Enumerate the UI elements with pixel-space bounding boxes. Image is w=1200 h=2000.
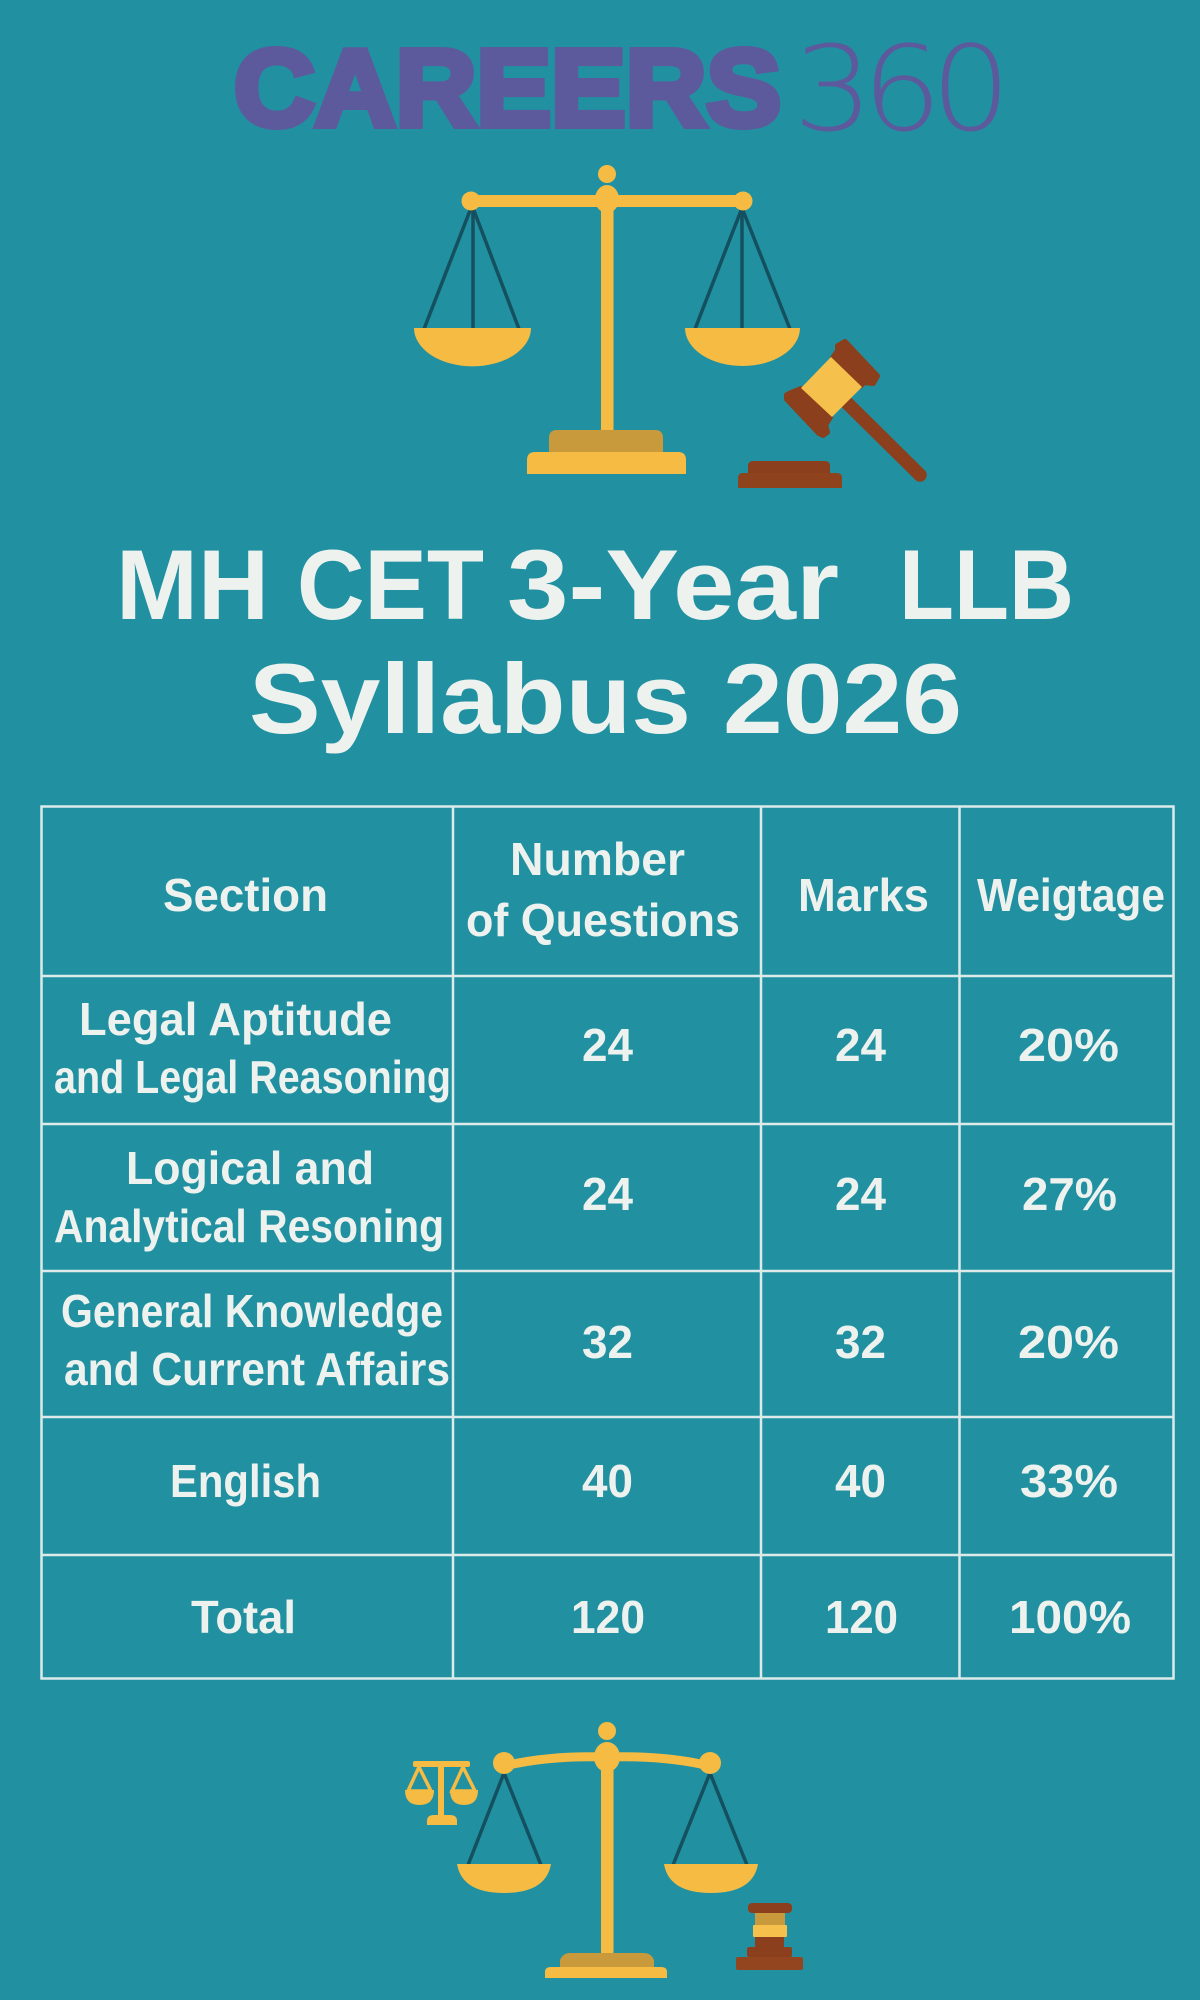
row: Logical and Analytical Reasoning: [54, 1142, 1117, 1252]
logo: Careers360: CAREERS: [234, 28, 781, 150]
title: MH: [116, 529, 269, 640]
row: Logical and Analytical Reasoning: 27%: [1022, 1168, 1117, 1220]
row: English: 33%: [1020, 1455, 1118, 1507]
row: Legal Aptitude: 24: [582, 1019, 633, 1071]
row: English: [170, 1455, 1118, 1507]
logo: Careers360: [234, 21, 1000, 158]
row: Total: 120: [825, 1591, 898, 1643]
row: General Knowledge: General Knowledge: [61, 1285, 443, 1337]
row: Legal Aptitude: 24: [835, 1019, 886, 1071]
row: English: English: [170, 1455, 321, 1507]
title: Syllabus: [249, 643, 691, 754]
icon: small scales (bottom left): [405, 1761, 478, 1825]
row: General Knowledge: 32: [835, 1316, 886, 1368]
title: LLB: [899, 529, 1074, 640]
row: Total: 100%: [1009, 1591, 1131, 1643]
row: Legal Aptitude: and Legal Reasoning: [54, 1051, 451, 1103]
row: Logical and Analytical Reasoning: Analytical Resoning: [54, 1200, 444, 1252]
table header row: Marks: [798, 869, 929, 921]
table header row: Weigtage: [977, 869, 1165, 921]
row: Legal Aptitude: [54, 993, 1119, 1103]
title: CET: [297, 529, 484, 640]
row: Logical and Analytical Reasoning: 24: [835, 1168, 886, 1220]
table header row: [163, 833, 1165, 946]
title: [116, 529, 1074, 754]
row: English: 40: [582, 1455, 633, 1507]
title: 2026: [723, 643, 962, 754]
icon: gavel (top): [738, 342, 920, 488]
row: General Knowledge: 20%: [1018, 1316, 1119, 1368]
logo: Careers360: 360: [793, 21, 1000, 158]
row: Total: 120: [571, 1591, 645, 1643]
row: English: 40: [835, 1455, 886, 1507]
row: Logical and Analytical Reasoning: 24: [582, 1168, 633, 1220]
row: General Knowledge: and Current Affairs: [64, 1343, 450, 1395]
row: Total: [191, 1591, 1131, 1643]
table header row: Number: [510, 833, 685, 885]
table: syllabus sections: [41, 806, 1174, 1679]
table header row: Section: [163, 869, 328, 921]
icon: scales of justice (top): [414, 165, 800, 474]
row: Total: Total: [191, 1591, 296, 1643]
row: Logical and Analytical Reasoning: Logical and: [126, 1142, 374, 1194]
row: General Knowledge: 32: [582, 1316, 633, 1368]
row: Legal Aptitude: Legal Aptitude: [79, 993, 392, 1045]
table header row: of Questions: [466, 894, 740, 946]
icon: scales of justice (bottom): [457, 1722, 758, 1978]
icon: small gavel (bottom right): [736, 1903, 803, 1970]
row: Legal Aptitude: 20%: [1018, 1019, 1119, 1071]
title: 3-Year: [507, 529, 839, 640]
row: General Knowledge: [61, 1285, 1119, 1395]
